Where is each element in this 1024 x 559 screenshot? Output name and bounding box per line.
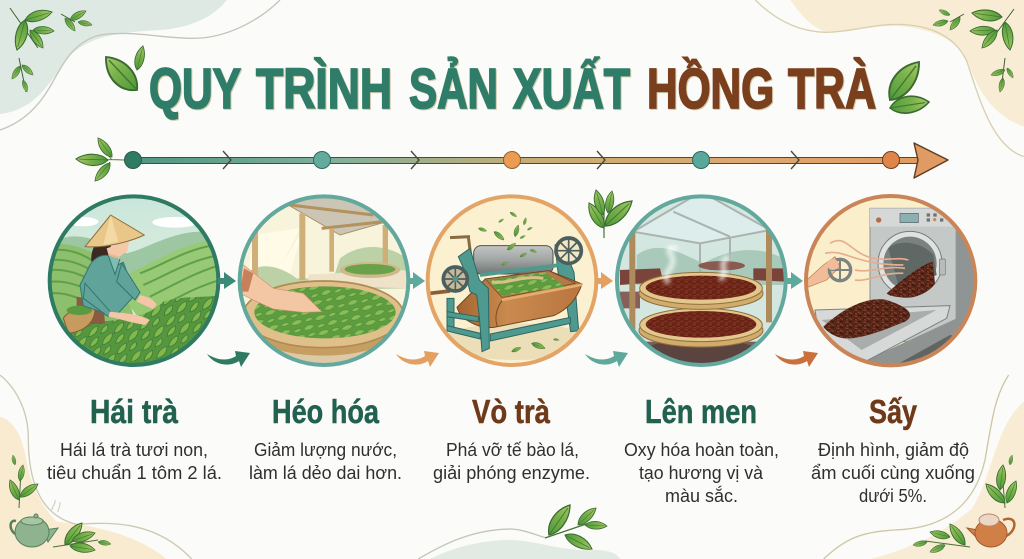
- timeline arrowhead: [914, 143, 948, 178]
- arrow: step 1 to 2: [218, 272, 236, 289]
- leaves: bottom centre branch: [543, 501, 607, 553]
- leaves: bottom left branch: [53, 520, 111, 554]
- title: TRÌNH: [256, 57, 392, 121]
- panel: step 2 illustration: [240, 195, 410, 368]
- corner decoration: bottom left: [0, 375, 192, 559]
- panel: step 3 illustration: [427, 195, 597, 368]
- step 2 description: Giảm lượng nước,: [254, 440, 397, 460]
- timeline node 2: [314, 152, 330, 168]
- step 1 heading: Hái trà: [90, 393, 179, 430]
- curved arrow 4: [775, 351, 818, 367]
- curved arrow 3: [585, 351, 628, 367]
- step 3 heading: Vò trà: [472, 393, 551, 430]
- title: TRÀ: [788, 57, 876, 121]
- step 1 description: Hái lá trà tươi non,: [60, 440, 208, 460]
- panel: step 1 illustration: [50, 195, 220, 372]
- corner decoration: bottom right: [824, 375, 1024, 559]
- step 2 description: [249, 440, 402, 483]
- icon: orange teapot: [967, 514, 1014, 547]
- step 3 description: giải phóng enzyme.: [433, 463, 590, 483]
- leaves: bottom right sprig: [982, 455, 1020, 508]
- leaves: bottom right branch: [913, 522, 970, 555]
- panel: step 5 illustration: [805, 195, 980, 368]
- curved arrow 2: [396, 351, 439, 367]
- timeline node 4: [692, 152, 710, 168]
- step 5 description: [811, 440, 975, 506]
- leaves: bottom left sprig: [6, 455, 40, 508]
- timeline node 1: [124, 152, 142, 168]
- step 2 description: làm lá dẻo dai hơn.: [249, 463, 402, 483]
- step 2 heading: Héo hóa: [272, 393, 380, 430]
- timeline bar: [133, 158, 918, 164]
- corner decoration: top right: [755, 0, 1024, 157]
- title: QUY: [149, 57, 241, 121]
- arrow: step 4 to 5: [785, 272, 803, 289]
- corner decoration: top left: [0, 0, 280, 130]
- title: HỒNG: [647, 56, 774, 121]
- arrow: step 3 to 4: [595, 272, 613, 289]
- step 4 description: màu sắc.: [665, 485, 738, 506]
- title: XUẤT: [513, 56, 630, 121]
- leaves: top left sprigs: [10, 7, 93, 93]
- step 4 description: tạo hương vị và: [639, 463, 764, 483]
- timeline node 5: [882, 152, 900, 168]
- step 1 description: tiêu chuẩn 1 tôm 2 lá.: [47, 463, 222, 483]
- leaves: top right sprigs: [932, 8, 1015, 93]
- step 4 heading: Lên men: [645, 393, 757, 430]
- icon: timeline leaves: [76, 136, 125, 184]
- icon: green teapot: [11, 500, 60, 547]
- corner decoration: bottom centre: [418, 529, 620, 559]
- step 3 description: [433, 440, 590, 483]
- curved arrow 1: [207, 351, 250, 367]
- title: SẢN: [409, 56, 498, 121]
- timeline node 3: [504, 152, 520, 168]
- step 5 description: Định hình, giảm độ: [818, 440, 969, 460]
- arrow: step 2 to 3: [407, 272, 425, 289]
- step 4 description: Oxy hóa hoàn toàn,: [624, 440, 779, 460]
- step 1 description: [47, 440, 222, 483]
- timeline chevrons: [223, 151, 799, 169]
- icon: title leaves right: [882, 56, 930, 116]
- step 4 description: [624, 440, 779, 506]
- timeline: [76, 136, 948, 184]
- icon: sprig between steps: [584, 189, 636, 238]
- step 5 description: dưới 5%.: [859, 486, 927, 506]
- step 3 description: Phá vỡ tế bào lá,: [446, 440, 579, 460]
- step 5 description: ẩm cuối cùng xuống: [811, 463, 975, 483]
- step 5 heading: Sấy: [869, 393, 918, 430]
- icon: title leaves left: [98, 45, 147, 98]
- title: [149, 56, 876, 121]
- panel: step 4 illustration: [617, 195, 787, 368]
